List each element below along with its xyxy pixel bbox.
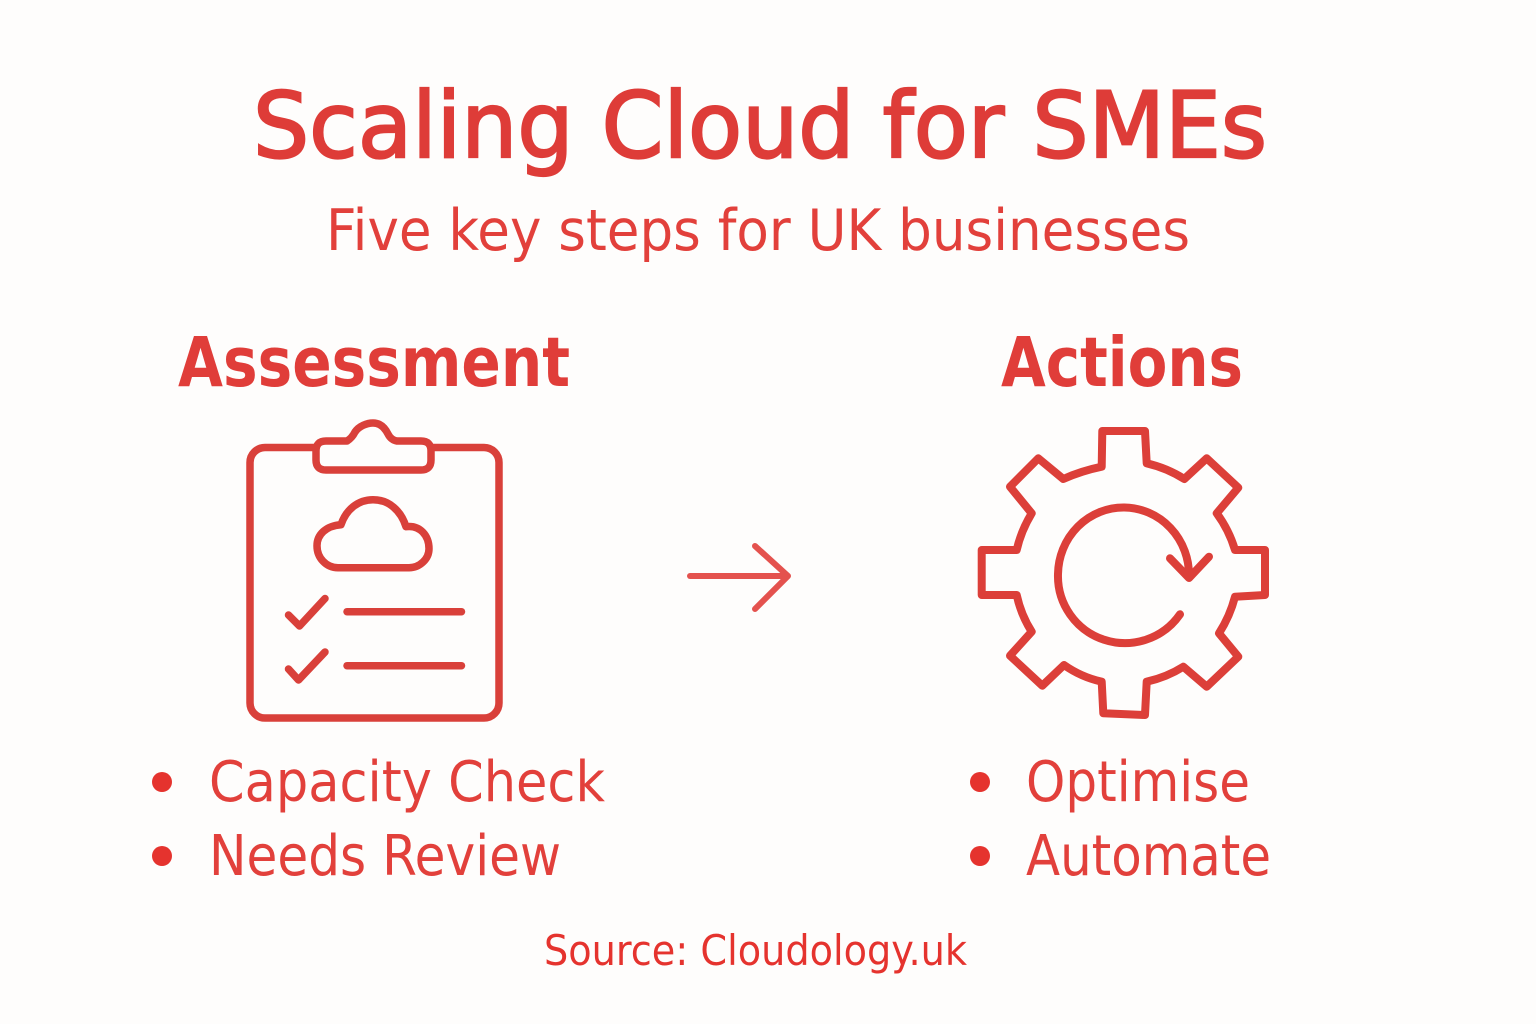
bullet list: actions: Automate bbox=[1026, 824, 1271, 889]
bullet list: assessment: Needs Review bbox=[209, 824, 561, 889]
subtitle: Five key steps for UK businesses bbox=[326, 198, 1190, 264]
icon: clipboard with cloud and checklist bbox=[250, 423, 499, 718]
icon: gear with circular arrow bbox=[982, 431, 1265, 715]
bullet list: assessment: Capacity Check bbox=[209, 750, 606, 815]
heading: Assessment: Assessment bbox=[178, 323, 570, 403]
bullet list: actions: Optimise bbox=[1026, 750, 1250, 815]
bullet list: assessment bbox=[152, 750, 606, 889]
panel: assessment bbox=[152, 323, 606, 889]
heading: Actions: Actions bbox=[1001, 323, 1243, 403]
bullet list: actions bbox=[970, 750, 1271, 889]
source note: Source: Cloudology.uk bbox=[544, 926, 968, 975]
arrow bbox=[690, 546, 788, 609]
title: Scaling Cloud for SMEs bbox=[253, 74, 1267, 179]
panel: actions bbox=[970, 323, 1271, 889]
